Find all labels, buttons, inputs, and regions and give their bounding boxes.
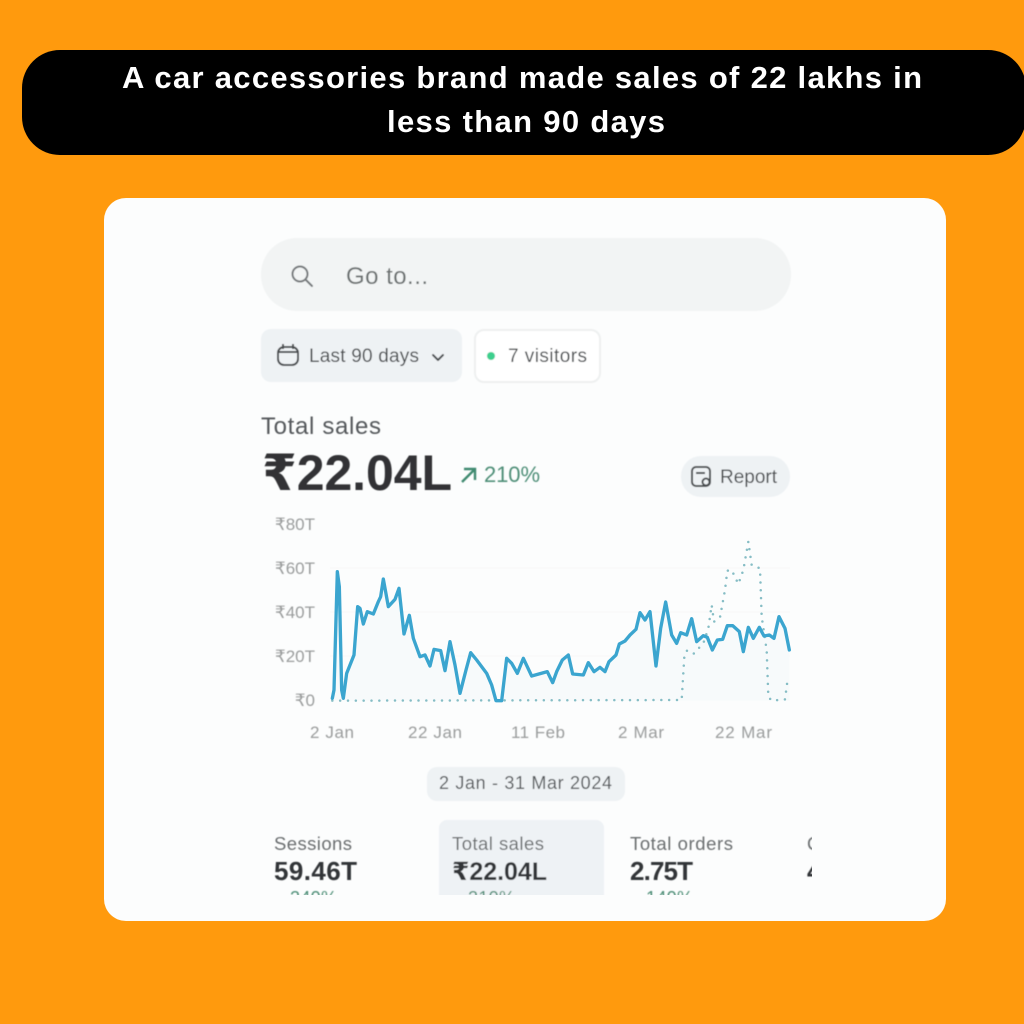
tile: total orders: 2.75T — [630, 856, 693, 886]
report button: Report — [720, 467, 778, 488]
sales area fill — [332, 572, 789, 701]
report button — [681, 456, 790, 497]
y axis labels — [275, 515, 315, 710]
tile: sessions: 59.46T — [274, 856, 357, 886]
total sales heading: ₹22.04L — [262, 445, 452, 501]
tile: clipped metric: 4 — [807, 856, 822, 886]
title banner: A car accessories brand made sales of 22 lakhs in — [122, 60, 922, 95]
tile: clipped metric — [806, 836, 812, 878]
tile: sessions: 240% — [290, 888, 337, 908]
growth indicator: 210% — [484, 462, 540, 487]
total sales heading — [261, 413, 452, 501]
date range filter — [261, 329, 462, 382]
tile: total orders: Total orders — [630, 833, 733, 854]
y axis labels: ₹0 — [295, 691, 315, 710]
x axis labels: 2 Mar — [618, 723, 664, 742]
tile: clipped metric: C — [807, 833, 820, 854]
tile: total sales: ₹22.04L — [452, 858, 547, 886]
y axis labels: ₹80T — [275, 515, 315, 534]
x axis labels: 22 Mar — [715, 723, 772, 742]
search bar: Go to... — [346, 263, 428, 290]
x axis labels: 22 Jan — [408, 723, 462, 742]
tile: total orders: 140% — [646, 888, 693, 908]
y axis labels: ₹40T — [275, 603, 315, 622]
date range filter: Last 90 days — [309, 346, 419, 367]
tile: sessions: Sessions — [274, 833, 352, 854]
x axis labels — [310, 723, 772, 742]
tile: total orders — [630, 836, 733, 895]
tile: total sales: 210% — [468, 888, 515, 908]
date range chip — [427, 767, 625, 801]
y axis labels: ₹60T — [275, 559, 315, 578]
total sales heading: Total sales — [261, 413, 381, 440]
line chart — [275, 515, 790, 742]
metric tiles — [274, 820, 812, 895]
tile: sessions — [274, 836, 358, 895]
x axis labels: 11 Feb — [511, 723, 565, 742]
y axis labels: ₹20T — [275, 647, 315, 666]
tile: total sales — [439, 820, 604, 895]
sales line — [332, 572, 789, 701]
search bar — [261, 238, 791, 311]
visitors badge — [475, 330, 600, 382]
x axis labels: 2 Jan — [310, 723, 354, 742]
title banner — [22, 50, 1024, 155]
panel: dashboard card — [104, 198, 946, 921]
visitors badge: 7 visitors — [508, 346, 587, 367]
comparison dotted line — [332, 542, 787, 701]
date range chip: 2 Jan - 31 Mar 2024 — [439, 773, 612, 793]
title banner: less than 90 days — [387, 104, 665, 139]
tile: total sales: Total sales — [452, 833, 544, 854]
